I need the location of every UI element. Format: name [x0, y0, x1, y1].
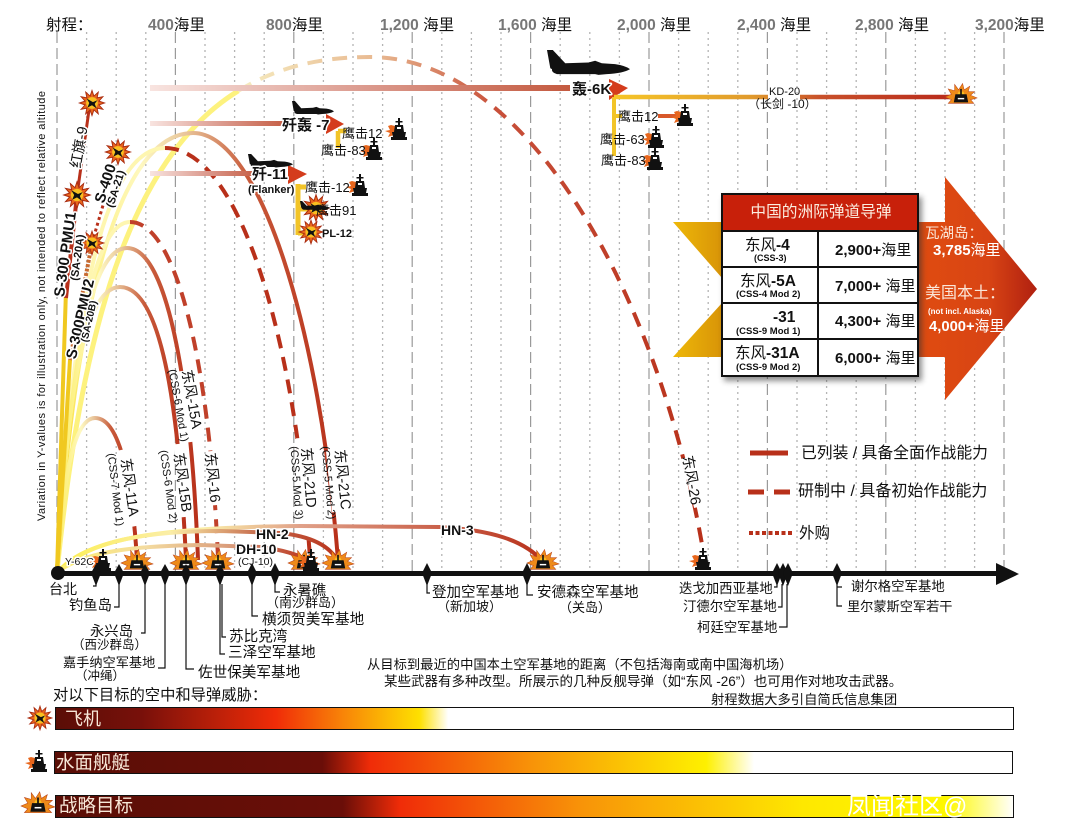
missile labels: 东风-15B — [170, 452, 195, 513]
missile labels: (SA-20B) — [79, 300, 100, 343]
range scale headings: 射程： — [46, 16, 93, 34]
range scale headings: 1,200 海里 — [380, 16, 454, 34]
notes: 射程数据大多引自简氏信息集团 — [711, 691, 897, 707]
location leader lines — [93, 584, 842, 669]
missile labels: 东风-15A — [178, 368, 205, 430]
threat bar: surface ships: 水面舰艇 — [56, 752, 130, 773]
weapon labels: 鹰击-12 — [305, 180, 350, 195]
range scale headings: 3,200海里 — [975, 16, 1045, 34]
location labels: （西沙群岛） — [72, 637, 147, 652]
SAM trajectories — [57, 103, 106, 572]
icon: KD-20 strategic target — [945, 84, 977, 103]
trajectory: DF-11A — [57, 418, 137, 572]
location labels: 登加空军基地 — [432, 584, 519, 601]
threat heading: 对以下目标的空中和导弹威胁： — [53, 687, 267, 704]
ICBM table: 2,900+海里 — [835, 242, 911, 259]
location labels: 汀德尔空军基地 — [683, 598, 777, 614]
ICBM big arrow: 3,785海里 — [933, 242, 1001, 259]
missile labels: (CJ-10) — [238, 556, 273, 568]
missile labels: (SA-21) — [104, 169, 128, 209]
trajectory label gaps — [121, 371, 698, 537]
weapon labels: （长剑 -10） — [748, 96, 817, 111]
ICBM table: (CSS-9 Mod 2) — [736, 362, 800, 373]
weapon connectors: JH-7 — [338, 131, 346, 148]
legend — [748, 444, 988, 542]
axis — [51, 563, 1019, 585]
weapon labels — [305, 86, 817, 240]
location labels: （冲绳） — [75, 668, 125, 683]
missile labels: (CSS-5 Mod 3) — [287, 446, 305, 520]
location labels: 钓鱼岛 — [69, 596, 112, 614]
weapon labels: 鹰击-83 — [321, 143, 366, 158]
ICBM table: 6,000+ 海里 — [835, 350, 915, 367]
icons: ships on aircraft routes — [346, 104, 693, 196]
location labels: （新加坡） — [437, 599, 502, 614]
aircraft range: JH-7 — [150, 101, 344, 134]
location labels: （南沙群岛） — [266, 595, 344, 610]
range scale headings: 800海里 — [266, 16, 323, 34]
legend: 研制中 / 具备初始作战能力 — [798, 482, 987, 500]
y-axis note: Variation in Y-values is for illustration only, not intended to reflect relative altitude — [36, 91, 48, 521]
weapon labels: 鹰击12 — [342, 126, 382, 141]
weapon connectors: H-6K — [614, 97, 958, 156]
location labels: 嘉手纳空军基地 — [63, 655, 155, 670]
location labels: 横须贺美军基地 — [262, 611, 365, 628]
aircraft range: H-6K — [150, 50, 630, 100]
location labels: 柯廷空军基地 — [697, 619, 777, 635]
threat bar: aircraft: 飞机 — [65, 709, 101, 729]
missile labels: S-300PMU2 — [63, 277, 98, 361]
location labels: （关岛） — [559, 600, 611, 615]
range scale headings: 2,800 海里 — [855, 16, 929, 34]
threat bar: strategic targets: 战略目标 — [59, 795, 133, 816]
weapon labels: PL-12 — [322, 228, 352, 240]
ICBM big arrow: (not incl. Alaska) — [928, 307, 992, 316]
missile labels: 东风-21D — [297, 447, 320, 508]
weapon labels: 鹰击-83 — [601, 153, 646, 168]
threat bar: surface ships — [25, 750, 1012, 774]
trajectory: DF-21D — [57, 148, 310, 572]
ICBM table: 4,300+ 海里 — [835, 313, 915, 330]
location labels: 三泽空军基地 — [228, 644, 316, 661]
legend: 外购 — [799, 524, 830, 542]
icons: air targets — [64, 90, 330, 255]
axis target icons — [89, 548, 711, 571]
ICBM big arrow: 美国本土： — [925, 284, 1005, 302]
location labels: 永兴岛 — [90, 623, 133, 640]
weapon labels: KD-20 — [769, 86, 800, 98]
ICBM table: (CSS-3) — [754, 253, 787, 263]
notes — [367, 656, 902, 707]
notes: 从目标到最近的中国本土空军基地的距离（不包括海南或南中国海机场） — [367, 656, 792, 672]
weapon connectors: J-11 — [298, 184, 316, 235]
weapon labels: 鹰击91 — [316, 203, 356, 218]
ICBM table: (CSS-9 Mod 1) — [736, 326, 800, 337]
missile labels: (SA-20A) — [69, 233, 87, 281]
weapon labels: 鹰击12 — [618, 109, 658, 124]
threat bar: aircraft — [28, 706, 1014, 730]
range scale headings: 1,600 海里 — [498, 16, 572, 34]
ICBM big arrow: 4,000+海里 — [929, 318, 1004, 335]
range scale headings: 2,000 海里 — [617, 16, 691, 34]
ICBM big arrow: 瓦湖岛： — [925, 225, 983, 242]
ICBM chevrons — [673, 222, 722, 357]
missile labels: 东风-16 — [201, 452, 224, 503]
ICBM table: 东风-31A — [735, 344, 800, 362]
aircraft range: JH-7: 歼轰 -7 — [282, 116, 330, 134]
missile labels: 东风-26 — [679, 454, 704, 506]
ICBM table — [722, 194, 922, 381]
missile labels: (CSS-6 Mod 2) — [157, 449, 179, 524]
location markers — [91, 563, 842, 586]
missile labels: S-300 PMU1 — [51, 211, 80, 298]
weapon labels: 鹰击-63 — [600, 132, 645, 147]
missile labels: DH-10 — [236, 541, 277, 557]
trajectory: DF-21C — [57, 133, 338, 572]
ICBM table: 7,000+ 海里 — [835, 278, 915, 295]
range scale headings: 2,400 海里 — [737, 16, 811, 34]
trajectory: DH-10 — [60, 545, 310, 570]
ICBM table: 东风-5A — [740, 272, 796, 290]
location labels — [49, 578, 952, 683]
location labels: 台北 — [49, 581, 77, 597]
location labels: 佐世保美军基地 — [198, 664, 301, 681]
aircraft range: H-6K: 轰-6K — [572, 80, 611, 98]
watermark: 凤闻社区@ — [847, 793, 967, 820]
missile labels: HN-3 — [441, 522, 474, 538]
ICBM table: -31 — [773, 309, 796, 326]
range grid — [57, 32, 1004, 572]
threat bar: strategic targets — [21, 792, 1014, 818]
location labels: 安德森空军基地 — [537, 584, 638, 601]
range scale headings: 400海里 — [148, 16, 205, 34]
missile labels: S-400 — [91, 162, 120, 205]
aircraft range: J-11: (Flanker) — [248, 184, 295, 196]
location labels: 迭戈加西亚基地 — [679, 580, 773, 596]
trajectory: HN-2 — [60, 531, 338, 570]
ICBM big arrow — [916, 177, 1037, 400]
missile labels — [51, 125, 704, 568]
aircraft range: J-11 — [150, 154, 307, 196]
location labels: 谢尔格空军基地 — [851, 578, 945, 594]
ICBM table: (CSS-4 Mod 2) — [736, 289, 800, 300]
aircraft range: J-11: 歼-11 — [252, 166, 288, 183]
missile labels: HN-2 — [256, 526, 289, 542]
missile labels: 东风-21C — [331, 449, 354, 510]
missile labels: Y-62C — [65, 556, 94, 568]
missile labels: 红旗-9 — [68, 125, 92, 169]
location labels: 里尔蒙斯空军若干 — [847, 599, 952, 614]
trajectory: HN-3 — [60, 526, 543, 570]
ICBM table: 东风-4 — [745, 236, 790, 254]
missile labels: 东风-11A — [117, 457, 142, 518]
trajectory: DF-15B — [57, 287, 186, 572]
missile labels: (CSS-5 Mod 2) — [319, 446, 337, 520]
ICBM table: 中国的洲际弹道导弹 — [750, 203, 892, 221]
legend: 已列装 / 具备全面作战能力 — [801, 444, 988, 462]
notes: 某些武器有多种改型。所展示的几种反舰导弹（如“东风 -26”）也可用作对地攻击武器。 — [384, 673, 902, 689]
trajectory: DF-26 — [57, 57, 703, 572]
range scale headings — [46, 16, 1045, 34]
missile labels: (CSS-7 Mod 1) — [105, 452, 125, 527]
location labels: 永暑礁 — [283, 582, 327, 599]
location labels: 苏比克湾 — [229, 628, 287, 645]
trajectory: DF-16 — [57, 222, 218, 572]
trajectory: DF-15A — [57, 248, 198, 572]
missile labels: (CSS-6 Mod 1) — [166, 368, 190, 443]
